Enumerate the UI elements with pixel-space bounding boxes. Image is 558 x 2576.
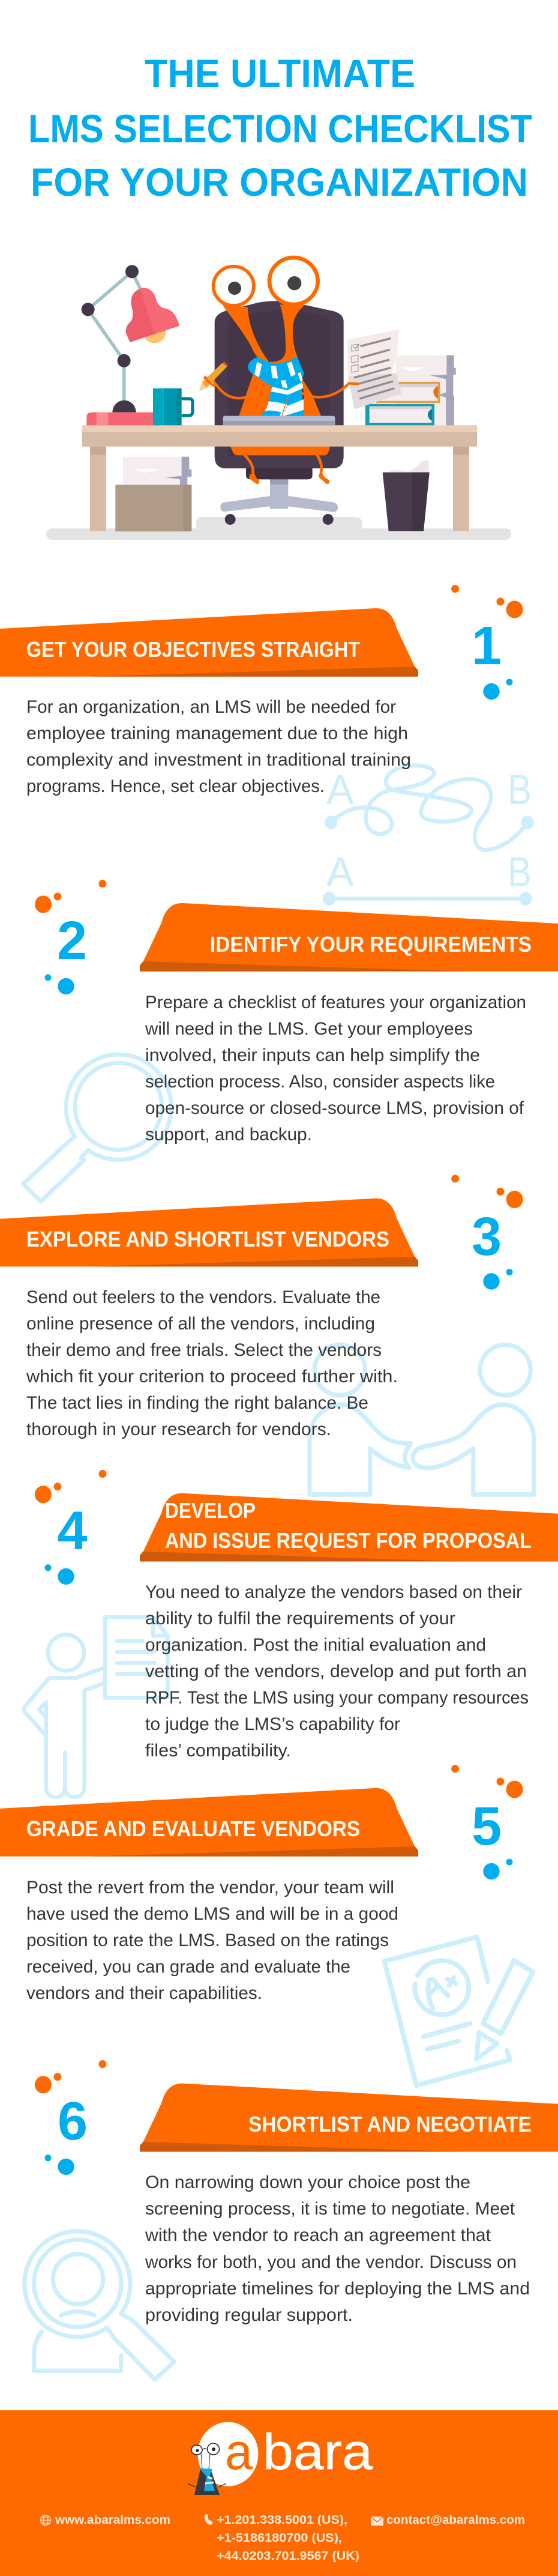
section 3: vendors (0, 1175, 523, 1439)
footer (0, 2410, 558, 2576)
body text: appropriate timelines for deploying the LMS and (145, 2279, 530, 2299)
checklist papers (347, 329, 401, 410)
body text: Post the revert from the vendor, your team will (26, 1878, 394, 1897)
logo mascot (188, 2443, 226, 2495)
number with dots (451, 585, 523, 700)
icon: A to B paths: A (326, 766, 354, 813)
mascot upper body, scarf and eyes (214, 258, 321, 416)
body text (145, 2172, 530, 2325)
icon: A to B paths: A (326, 848, 354, 895)
icon: person under magnifier (25, 2231, 175, 2380)
title (28, 51, 532, 204)
number with dots (35, 1470, 107, 1585)
number with dots: 5 (472, 1797, 502, 1857)
number with dots (451, 1765, 523, 1879)
body text (145, 993, 526, 1144)
body text: files’ compatibility. (145, 1741, 291, 1761)
logo: abara: bara (263, 2423, 373, 2480)
number with dots (451, 1175, 523, 1290)
heading: SHORTLIST AND NEGOTIATE (248, 2112, 532, 2136)
mascot arms (205, 378, 358, 398)
website contact: www.abaralms.com (55, 2514, 170, 2527)
number with dots: 4 (57, 1501, 88, 1561)
body text: ability to fulfil the requirements of your (145, 1609, 455, 1628)
heading: GET YOUR OBJECTIVES STRAIGHT (26, 637, 360, 662)
section 5: grade vendors (0, 1765, 523, 2003)
right eye (269, 258, 318, 304)
body text: RPF. Test the LMS using your company resources (145, 1688, 529, 1708)
icon: graded paper and pencil (385, 1937, 533, 2085)
body text (26, 1878, 398, 2003)
body text: with the vendor to reach an agreement that (145, 2225, 491, 2245)
body text: thorough in your research for vendors. (26, 1420, 331, 1439)
body text: screening process, it is time to negotiate. Meet (145, 2199, 515, 2219)
number with dots: 1 (472, 616, 502, 676)
body text: Send out feelers to the vendors. Evaluate the (26, 1287, 380, 1307)
body text (145, 1582, 529, 1761)
body text (26, 1287, 398, 1439)
body text: to judge the LMS’s capability for (145, 1714, 400, 1734)
left eye (214, 267, 254, 306)
icon: A to B paths: B (508, 766, 532, 813)
body text: received, you can grade and evaluate the (26, 1957, 350, 1977)
heading: EXPLORE AND SHORTLIST VENDORS (26, 1227, 389, 1251)
body text: You need to analyze the vendors based on their (145, 1582, 522, 1602)
heading: DEVELOP (165, 1498, 256, 1523)
phone contact: +1-5186180700 (US), (217, 2532, 342, 2545)
icon: A to B paths: B (508, 848, 532, 895)
body text: have used the demo LMS and will be in a good (26, 1904, 398, 1924)
heading (165, 1498, 532, 1553)
banner: develop and issue request for proposal (140, 1493, 558, 1561)
section 1: objectives (0, 585, 523, 796)
body text: works for both, you and the vendor. Discuss on (145, 2252, 517, 2272)
body text: selection process. Also, consider aspects like (145, 1072, 495, 1092)
heading: GRADE AND EVALUATE VENDORS (26, 1816, 360, 1841)
body text: Prepare a checklist of features your organization (145, 993, 526, 1012)
desk (82, 425, 477, 531)
mug (153, 389, 193, 425)
office chair (215, 301, 344, 525)
number with dots (35, 2060, 107, 2175)
body text: programs. Hence, set clear objectives. (26, 776, 325, 796)
body text: involved, their inputs can help simplify the (145, 1045, 480, 1065)
icon: presenter with document (24, 1617, 167, 1797)
logo: abara (198, 2422, 373, 2486)
body text: online presence of all the vendors, including (26, 1314, 375, 1334)
body text: On narrowing down your choice post the (145, 2172, 470, 2192)
body text: support, and backup. (145, 1125, 312, 1144)
body text: vendors and their capabilities. (26, 1983, 262, 2003)
banner: grade and evaluate vendors (0, 1788, 418, 1857)
pencil (199, 361, 228, 392)
desk lamp (82, 265, 179, 413)
body text: open-source or closed-source LMS, provision of (145, 1098, 524, 1118)
banner: get your objectives straight (0, 608, 418, 677)
heading: IDENTIFY YOUR REQUIREMENTS (210, 932, 532, 957)
section 2: requirements (35, 880, 558, 1144)
phone contact (205, 2514, 359, 2563)
floor shadow (46, 517, 511, 540)
body text (26, 697, 411, 796)
number with dots: 3 (472, 1207, 502, 1267)
phone contact: +1.201.338.5001 (US), (217, 2514, 347, 2527)
icon: handshake (310, 1345, 534, 1495)
illustration: mascot at desk (46, 258, 511, 540)
body text: The tact lies in finding the right balance. Be (26, 1393, 368, 1413)
mascot lower body and legs (230, 446, 329, 485)
banner: shortlist and negotiate (140, 2084, 558, 2152)
body text: For an organization, an LMS will be needed for (26, 697, 396, 717)
body text: position to rate the LMS. Based on the ratings (26, 1930, 389, 1950)
storage box with papers (115, 457, 191, 531)
email contact: contact@abaralms.com (386, 2514, 525, 2527)
section 6: negotiate (35, 2060, 558, 2325)
body text: organization. Post the initial evaluation and (145, 1635, 486, 1655)
body text: their demo and free trials. Select the vendors (26, 1340, 382, 1360)
number with dots: 6 (58, 2091, 88, 2151)
number with dots: 2 (57, 911, 87, 971)
title: THE ULTIMATE (145, 51, 415, 95)
body text: providing regular support. (145, 2305, 353, 2325)
waste bin (383, 460, 430, 531)
banner: identify your requirements (140, 903, 558, 972)
number with dots (35, 880, 107, 994)
body text: vetting of the vendors, develop and put forth an (145, 1661, 527, 1681)
body text: will need in the LMS. Get your employees (145, 1019, 473, 1039)
body text: complexity and investment in traditional training (26, 750, 411, 770)
logo: abara: a (225, 2423, 253, 2480)
title: FOR YOUR ORGANIZATION (31, 160, 528, 204)
stacked books and papers (365, 355, 456, 425)
red book (86, 413, 161, 425)
banner: explore and shortlist vendors (0, 1199, 418, 1266)
icon: magnifying glass (23, 1054, 171, 1202)
body text: employee training management due to the high (26, 724, 408, 743)
body text: which fit your criterion to proceed further with. (26, 1367, 398, 1386)
phone contact: +44.0203.701.9567 (UK) (217, 2550, 359, 2563)
icon: A to B paths (323, 766, 534, 906)
laptop (223, 416, 335, 425)
section 4: request for proposal (35, 1470, 558, 1761)
